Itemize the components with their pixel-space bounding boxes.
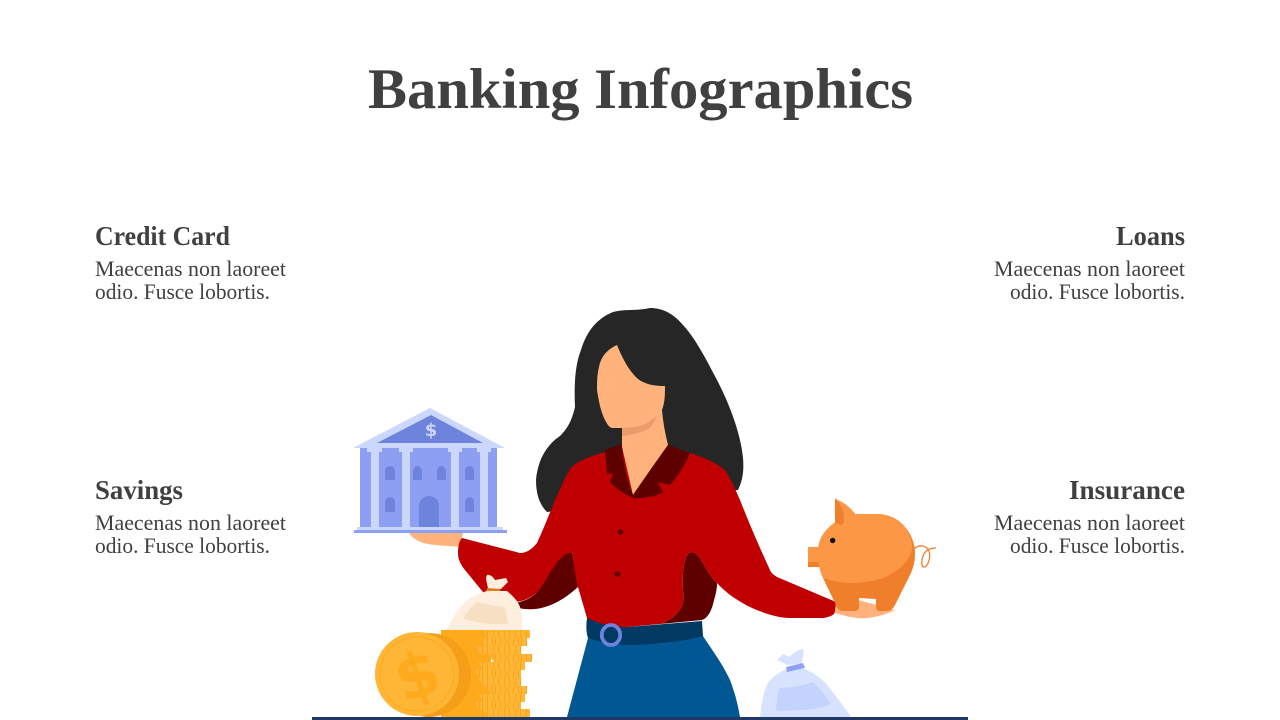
- text block: insurance: Insurance: [1069, 475, 1185, 505]
- icon: gold coin: [375, 632, 471, 717]
- shirt shadow: [515, 552, 717, 624]
- left hand: [409, 533, 463, 547]
- text block: insurance: [994, 475, 1185, 558]
- text block: savings: odio. Fusce lobortis.: [95, 533, 270, 558]
- icon: bank building: $: [425, 420, 437, 441]
- shirt: [458, 452, 836, 627]
- table line: [312, 717, 968, 720]
- icon: money bag blue: [760, 649, 851, 717]
- text block: savings: [95, 475, 286, 558]
- text block: credit card: Credit Card: [95, 221, 230, 251]
- belt: [586, 618, 703, 645]
- title: Banking Infographics: [368, 58, 913, 121]
- text block: loans: odio. Fusce lobortis.: [1010, 279, 1185, 304]
- text block: loans: [994, 221, 1185, 304]
- belt buckle: [602, 625, 620, 645]
- icon: gold coin: $: [385, 634, 449, 717]
- right hand: [835, 600, 895, 618]
- text block: savings: Savings: [95, 475, 183, 505]
- text block: insurance: Maecenas non laoreet: [994, 510, 1185, 535]
- text block: savings: Maecenas non laoreet: [95, 510, 286, 535]
- illustration: woman: [409, 308, 895, 717]
- face and neck: [597, 345, 668, 495]
- icon: piggy bank: [808, 498, 936, 611]
- text block: credit card: odio. Fusce lobortis.: [95, 279, 270, 304]
- hair: [536, 308, 743, 512]
- text block: loans: Loans: [1116, 221, 1185, 251]
- shirt buttons: [615, 529, 623, 577]
- skirt: [567, 636, 740, 717]
- icon: coin stack: [441, 630, 532, 717]
- collar: [605, 444, 690, 499]
- text block: credit card: [95, 221, 286, 304]
- text block: insurance: odio. Fusce lobortis.: [1010, 533, 1185, 558]
- text block: credit card: Maecenas non laoreet: [95, 256, 286, 281]
- icon: bank building: [353, 408, 507, 533]
- text block: loans: Maecenas non laoreet: [994, 256, 1185, 281]
- icon: money bag cream: [447, 575, 522, 630]
- neck shadow: [622, 415, 657, 436]
